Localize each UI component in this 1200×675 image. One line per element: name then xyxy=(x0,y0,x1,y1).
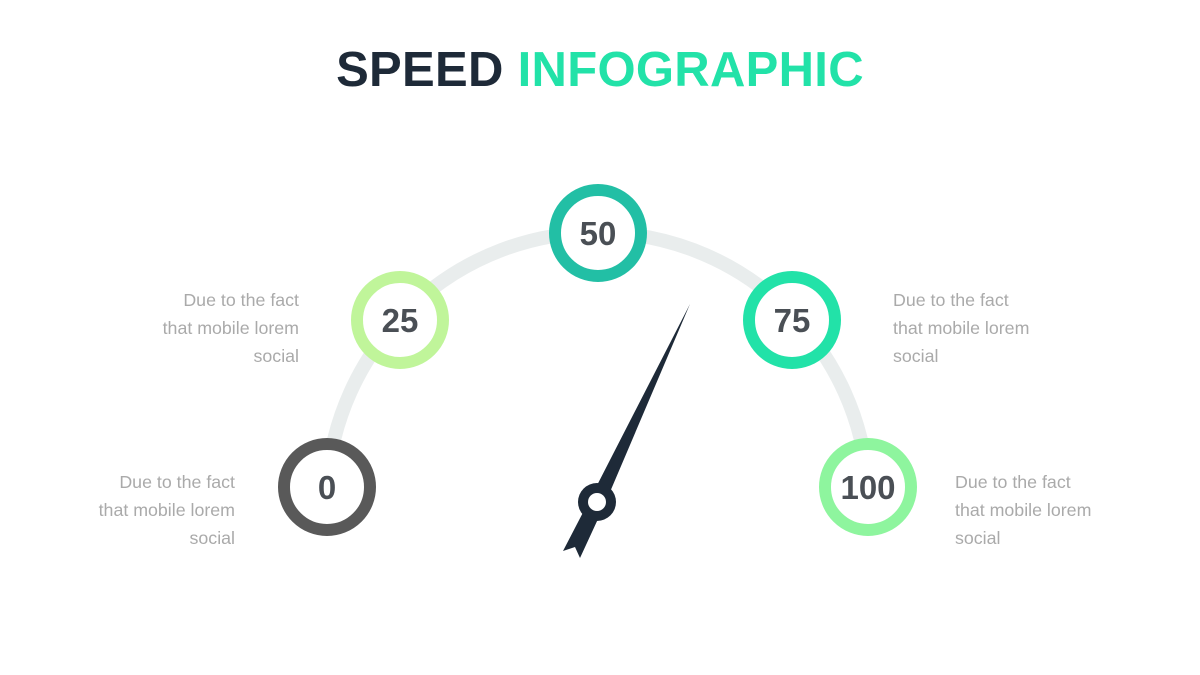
marker: 50: 50 xyxy=(580,215,616,252)
gauge arc track xyxy=(327,232,868,487)
text block: left bottom xyxy=(99,472,235,548)
text block: left top: that mobile lorem xyxy=(163,318,299,338)
marker: 100 xyxy=(825,444,911,530)
text block: right bottom xyxy=(955,472,1091,548)
text block: left top: social xyxy=(254,346,299,366)
text block: right top: that mobile lorem xyxy=(893,318,1029,338)
text block: left bottom: Due to the fact xyxy=(119,472,235,492)
marker: 25: 25 xyxy=(382,302,418,339)
text block: left bottom: that mobile lorem xyxy=(99,500,235,520)
text block: left top: Due to the fact xyxy=(183,290,299,310)
text block: right top: social xyxy=(893,346,938,366)
marker: 50 xyxy=(555,190,641,276)
title: SPEED INFOGRAPHIC xyxy=(336,43,864,97)
marker: 75 xyxy=(749,277,835,363)
marker: 0 xyxy=(284,444,370,530)
marker: 0: 0 xyxy=(318,469,336,506)
marker: 100: 100 xyxy=(840,469,896,506)
text block: right top: Due to the fact xyxy=(893,290,1009,310)
text block: right bottom: social xyxy=(955,528,1000,548)
text block: right top xyxy=(893,290,1029,366)
text block: right bottom: Due to the fact xyxy=(955,472,1071,492)
text block: left top xyxy=(163,290,299,366)
text block: right bottom: that mobile lorem xyxy=(955,500,1091,520)
marker: 75: 75 xyxy=(774,302,810,339)
text block: left bottom: social xyxy=(190,528,235,548)
needle xyxy=(563,304,690,558)
marker: 25 xyxy=(357,277,443,363)
